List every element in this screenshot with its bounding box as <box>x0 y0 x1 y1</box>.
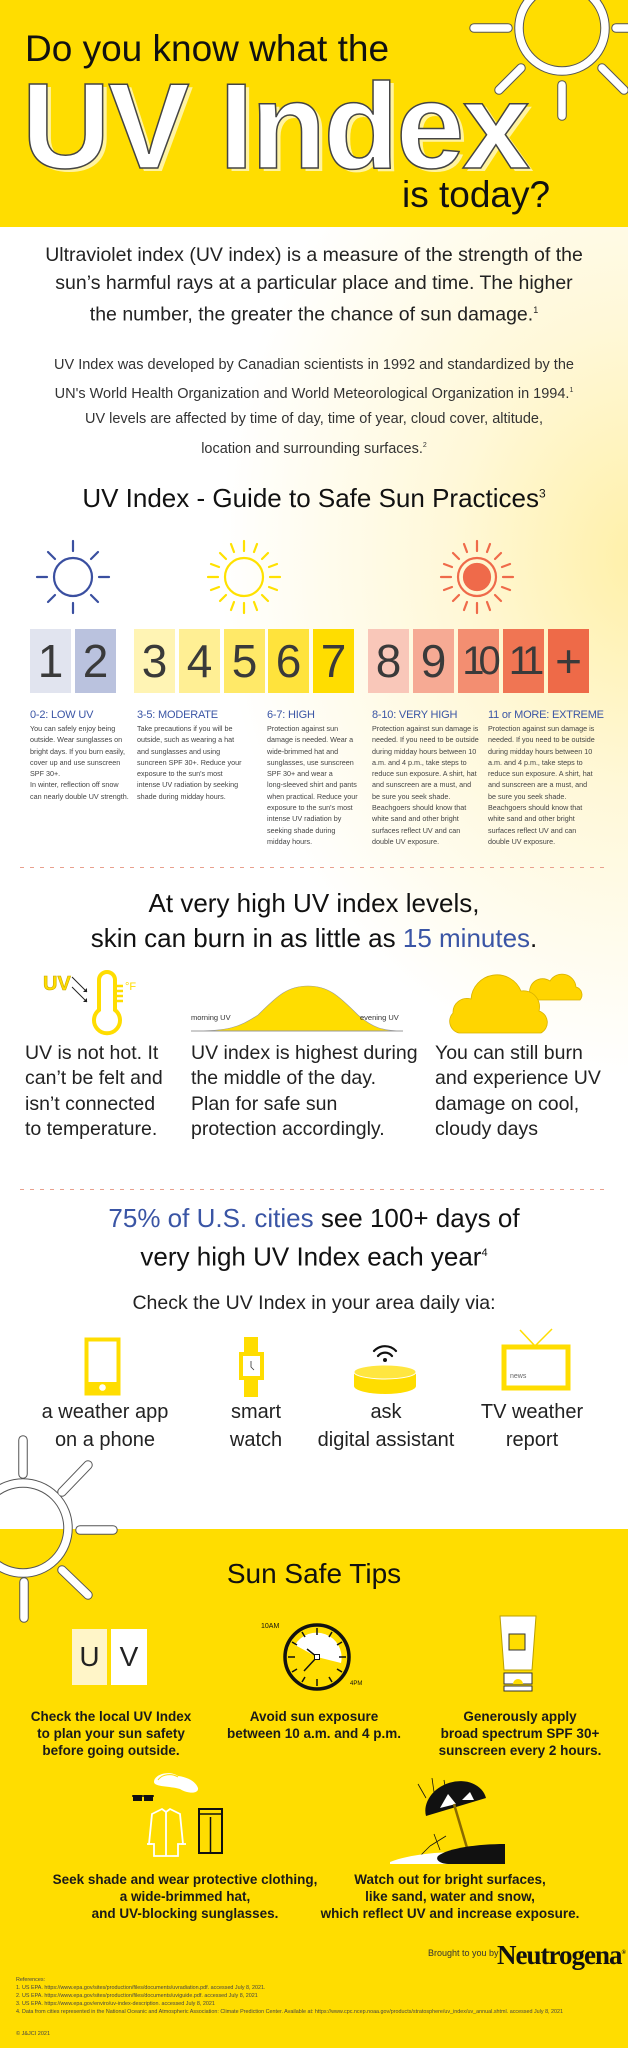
labels: check methods: a weather app <box>42 1401 168 1423</box>
caption: check UV: Check the local UV Index <box>31 1709 191 1724</box>
category: very high: a.m. and 4 p.m., take steps to <box>372 758 467 767</box>
icon: UV tiles: V <box>120 1641 138 1672</box>
category: extreme: Beachgoers should know that <box>488 803 582 812</box>
category: moderate: exposure to the sun's most <box>137 769 223 778</box>
logo: brought to you by Neutrogena: Brought to you by <box>428 1948 499 1958</box>
category: very high: Protection against sun damage is <box>372 724 478 733</box>
title line 1: Do you know what the <box>25 28 389 69</box>
caption: check UV: before going outside. <box>42 1743 180 1758</box>
category: extreme: a.m. and 4 p.m., take steps to <box>488 758 583 767</box>
category: very high: during midday hours between 10 <box>372 747 476 756</box>
category: low: In winter, reflection off snow <box>30 780 119 789</box>
icon: digital assistant <box>354 1345 416 1394</box>
UV scale boxes: 6 <box>276 635 301 687</box>
icons: three suns <box>36 540 514 614</box>
icon: TV news: news <box>510 1373 527 1380</box>
caption: check UV: to plan your sun safety <box>37 1726 185 1741</box>
labels: check methods: digital assistant <box>318 1429 454 1451</box>
heading: sun safe tips: Sun Safe Tips <box>227 1558 401 1589</box>
caption: shade and clothing: a wide-brimmed hat, <box>120 1889 250 1904</box>
caption: avoid exposure: between 10 a.m. and 4 p.m. <box>227 1726 401 1741</box>
category: high: SPF 30+ and wear a <box>267 769 333 778</box>
icon: UV tiles <box>72 1629 147 1685</box>
category: very high: be sure you seek shade. <box>372 792 450 801</box>
caption: sunscreen: broad spectrum SPF 30+ <box>441 1726 599 1741</box>
UV scale boxes: 1 <box>38 635 63 687</box>
headline: 15 minutes: At very high UV index levels, <box>149 888 479 918</box>
category: extreme: double UV exposure. <box>488 837 555 846</box>
text: cloudy days: cloudy days <box>435 1118 538 1140</box>
category: very high: reduce sun exposure. A shirt, hat <box>372 769 477 778</box>
category: extreme: needed. If you need to be outside <box>488 735 595 744</box>
icon: UV and thermometer <box>43 970 136 1036</box>
category: extreme: 11 or MORE: EXTREME <box>488 709 604 721</box>
references: 3. US EPA. https://www.epa.gov/enviro/uv-index-description. accessed July 8, 2021 <box>16 2001 215 2007</box>
intro paragraph: sun’s harmful rays at a particular place and time. The higher <box>55 272 573 294</box>
category: extreme: be sure you seek shade. <box>488 792 566 801</box>
category: high <box>267 709 358 846</box>
category: low: can nearly double UV strength. <box>30 792 129 801</box>
caption: bright surfaces: like sand, water and snow, <box>365 1889 535 1904</box>
category: very high: white sand and other bright <box>372 814 459 823</box>
category: moderate: shade during midday hours. <box>137 792 226 801</box>
headline: 75% of cities: very high UV Index each year4 <box>140 1242 488 1272</box>
text: midday: Plan for safe sun <box>191 1093 337 1115</box>
headline: 15 minutes: skin can burn in as little as 15 minutes. <box>91 923 537 953</box>
labels: check methods: on a phone <box>55 1429 155 1451</box>
UV scale boxes: 10 <box>462 639 495 683</box>
title UV Index: UV Index <box>22 58 528 194</box>
logo: brought to you by Neutrogena: Neutrogena® <box>497 1940 625 1970</box>
icon: clock 10am-4pm <box>261 1623 362 1691</box>
chart: UV bell curve: morning UV <box>191 1013 231 1022</box>
category: very high: needed. If you need to be outside <box>372 735 479 744</box>
category: high: seeking shade during <box>267 826 335 835</box>
caption: shade and clothing: Seek shade and wear protective clothing, <box>53 1872 317 1887</box>
category: moderate: suncreen SPF 30+. Reduce your <box>137 758 241 767</box>
category: extreme <box>488 709 604 846</box>
category: very high: surfaces reflect UV and can <box>372 826 460 835</box>
text: midday: protection accordingly. <box>191 1118 385 1140</box>
category: low: 0-2: LOW UV <box>30 709 93 721</box>
UV scale boxes: 5 <box>232 635 257 687</box>
text: UV not hot: can’t be felt and <box>25 1067 163 1089</box>
category: low <box>30 709 129 801</box>
category: extreme: during midday hours between 10 <box>488 747 592 756</box>
category: high: wide-brimmed hat and <box>267 747 338 756</box>
icon: sunscreen tube <box>500 1616 536 1692</box>
category: moderate: 3-5: MODERATE <box>137 709 218 721</box>
UV scale boxes: 11 <box>509 639 538 683</box>
UV scale boxes: 2 <box>83 635 108 687</box>
category: extreme: Protection against sun damage is <box>488 724 594 733</box>
category: high: exposure to the sun's most <box>267 803 353 812</box>
labels: check methods: report <box>506 1429 558 1451</box>
category: high: long-sleeved shirt and pants <box>267 780 357 789</box>
category: low: bright days. If you burn easily, <box>30 747 125 756</box>
caption: bright surfaces: Watch out for bright surfaces, <box>354 1872 546 1887</box>
category: high: midday hours. <box>267 837 312 846</box>
category: high: intense UV radiation by <box>267 814 341 823</box>
category: moderate: Take precautions if you will be <box>137 724 232 733</box>
category: low: outside. Wear sunglasses on <box>30 735 122 744</box>
intro paragraph <box>45 244 583 326</box>
category: moderate <box>137 709 242 801</box>
caption: avoid exposure <box>227 1709 401 1741</box>
category: high: damage is needed. Wear a <box>267 735 353 744</box>
history paragraph: UV Index was developed by Canadian scientists in 1992 and standardized by the <box>54 357 574 373</box>
icon: sun outline top right <box>469 0 628 121</box>
text: cloudy days: You can still burn <box>435 1042 583 1064</box>
icon: clock 10am-4pm: 10AM <box>261 1623 279 1630</box>
icon: TV news <box>502 1328 570 1390</box>
intro paragraph: Ultraviolet index (UV index) is a measure of the strength of the <box>45 244 583 266</box>
references: 1. US EPA. https://www.epa.gov/sites/production/files/documents/uvradiation.pdf. accessed July 8, 2021. <box>16 1985 266 1991</box>
labels: check methods: smart <box>231 1401 281 1423</box>
UV scale boxes <box>30 629 589 693</box>
category: very high: Beachgoers should know that <box>372 803 466 812</box>
category: high: Protection against sun <box>267 724 338 733</box>
icon: UV and thermometer: °F <box>125 981 136 993</box>
category: very high <box>372 709 479 846</box>
category: extreme: surfaces reflect UV and can <box>488 826 576 835</box>
caption: sunscreen <box>439 1709 601 1758</box>
caption: check UV <box>31 1709 192 1758</box>
category: moderate: intense UV radiation by seeking <box>137 780 238 789</box>
header band <box>0 0 628 227</box>
history paragraph <box>54 357 574 457</box>
history paragraph: UN's World Health Organization and World Meteorological Organization in 1994.1 <box>55 386 573 402</box>
icon: clothing hat glasses <box>132 1773 223 1857</box>
text: cloudy days <box>435 1042 601 1140</box>
UV scale boxes: 4 <box>187 635 212 687</box>
headline: 15 minutes <box>91 888 537 953</box>
text: midday: the middle of the day. <box>191 1067 376 1089</box>
text: UV not hot: UV is not hot. It <box>25 1042 158 1064</box>
category: very high: double UV exposure. <box>372 837 439 846</box>
icon: sun outline bottom left <box>0 1435 118 1623</box>
icon: clouds <box>449 974 582 1034</box>
chart: UV bell curve: evening UV <box>360 1013 399 1022</box>
category: high: when practical. Reduce your <box>267 792 358 801</box>
icon: phone <box>84 1338 120 1396</box>
copyright: © J&JCI 2021 <box>16 2031 50 2037</box>
title line 3: is today? <box>402 174 550 215</box>
text: UV not hot: to temperature. <box>25 1118 157 1140</box>
labels: check methods: ask <box>370 1401 402 1423</box>
UV scale boxes: + <box>555 635 582 687</box>
labels: check methods: TV weather <box>481 1401 583 1423</box>
category: high: sunglasses, use sunscreen <box>267 758 354 767</box>
intro paragraph: the number, the greater the chance of sun damage.1 <box>90 304 538 326</box>
text: UV not hot: isn’t connected <box>25 1093 155 1115</box>
caption: sunscreen: sunscreen every 2 hours. <box>439 1743 601 1758</box>
category: moderate: and sunglasses and using <box>137 747 220 756</box>
UV scale boxes: 9 <box>421 635 446 687</box>
icon: umbrella on beach <box>390 1778 505 1864</box>
category: high: 6-7: HIGH <box>267 709 315 721</box>
text: midday <box>191 1042 418 1140</box>
category: low: SPF 30+. <box>30 769 60 778</box>
text: UV not hot <box>25 1042 163 1140</box>
headline: 75% of cities: 75% of U.S. cities see 100+ days of <box>108 1203 520 1233</box>
text: midday: UV index is highest during <box>191 1042 418 1064</box>
logo: brought to you by Neutrogena <box>428 1940 626 1970</box>
category: very high: and sunscreen are a must, and <box>372 780 471 789</box>
history paragraph: UV levels are affected by time of day, time of year, cloud cover, altitude, <box>85 411 543 427</box>
caption: avoid exposure: Avoid sun exposure <box>250 1709 378 1724</box>
caption: shade and clothing <box>53 1872 317 1921</box>
bottom yellow panel <box>0 1529 628 2048</box>
references: References: <box>16 1977 45 1983</box>
category: very high: 8-10: VERY HIGH <box>372 709 457 721</box>
heading: guide: UV Index - Guide to Safe Sun Practices3 <box>82 483 546 513</box>
category: low: You can safely enjoy being <box>30 724 115 733</box>
text: cloudy days: and experience UV <box>435 1067 601 1089</box>
background glow <box>0 227 628 1529</box>
category: low: cover up and use sunscreen <box>30 758 120 767</box>
category: extreme: white sand and other bright <box>488 814 575 823</box>
icon: UV and thermometer: UV <box>43 973 71 995</box>
icon: UV tiles: U <box>79 1641 100 1672</box>
category: moderate: outside, such as wearing a hat <box>137 735 234 744</box>
caption: bright surfaces <box>320 1872 579 1921</box>
references: 4. Data from cities represented in the National Oceanic and Atmospheric Association: Climate Prediction Center. Available at: https://www.cpc.ncep.noaa.gov/products/stratosphere/uv_index/uv_annual.shtml. accessed July 8, 2021 <box>16 2009 563 2015</box>
text: cloudy days: damage on cool, <box>435 1093 579 1115</box>
icon: smart watch <box>239 1337 264 1397</box>
caption: bright surfaces: which reflect UV and increase exposure. <box>321 1906 579 1921</box>
chart: UV bell curve <box>191 986 403 1032</box>
caption: shade and clothing: and UV-blocking sunglasses. <box>92 1906 278 1921</box>
references: 2. US EPA. https://www.epa.gov/sites/production/files/documents/uviguide.pdf. accessed July 8, 2021 <box>16 1993 258 1999</box>
text: check daily: Check the UV Index in your area daily via: <box>132 1292 496 1314</box>
headline: 75% of cities <box>108 1203 520 1272</box>
history paragraph: location and surrounding surfaces.2 <box>201 441 427 457</box>
category: extreme: reduce sun exposure. A shirt, hat <box>488 769 593 778</box>
UV scale boxes: 7 <box>321 635 346 687</box>
UV scale boxes: 8 <box>376 635 401 687</box>
category: extreme: and sunscreen are a must, and <box>488 780 587 789</box>
icon: clock 10am-4pm: 4PM <box>350 1681 362 1687</box>
labels: check methods: watch <box>230 1429 282 1451</box>
caption: sunscreen: Generously apply <box>463 1709 577 1724</box>
references <box>16 1977 563 2015</box>
labels: check methods <box>42 1401 583 1451</box>
UV scale boxes: 3 <box>142 635 167 687</box>
